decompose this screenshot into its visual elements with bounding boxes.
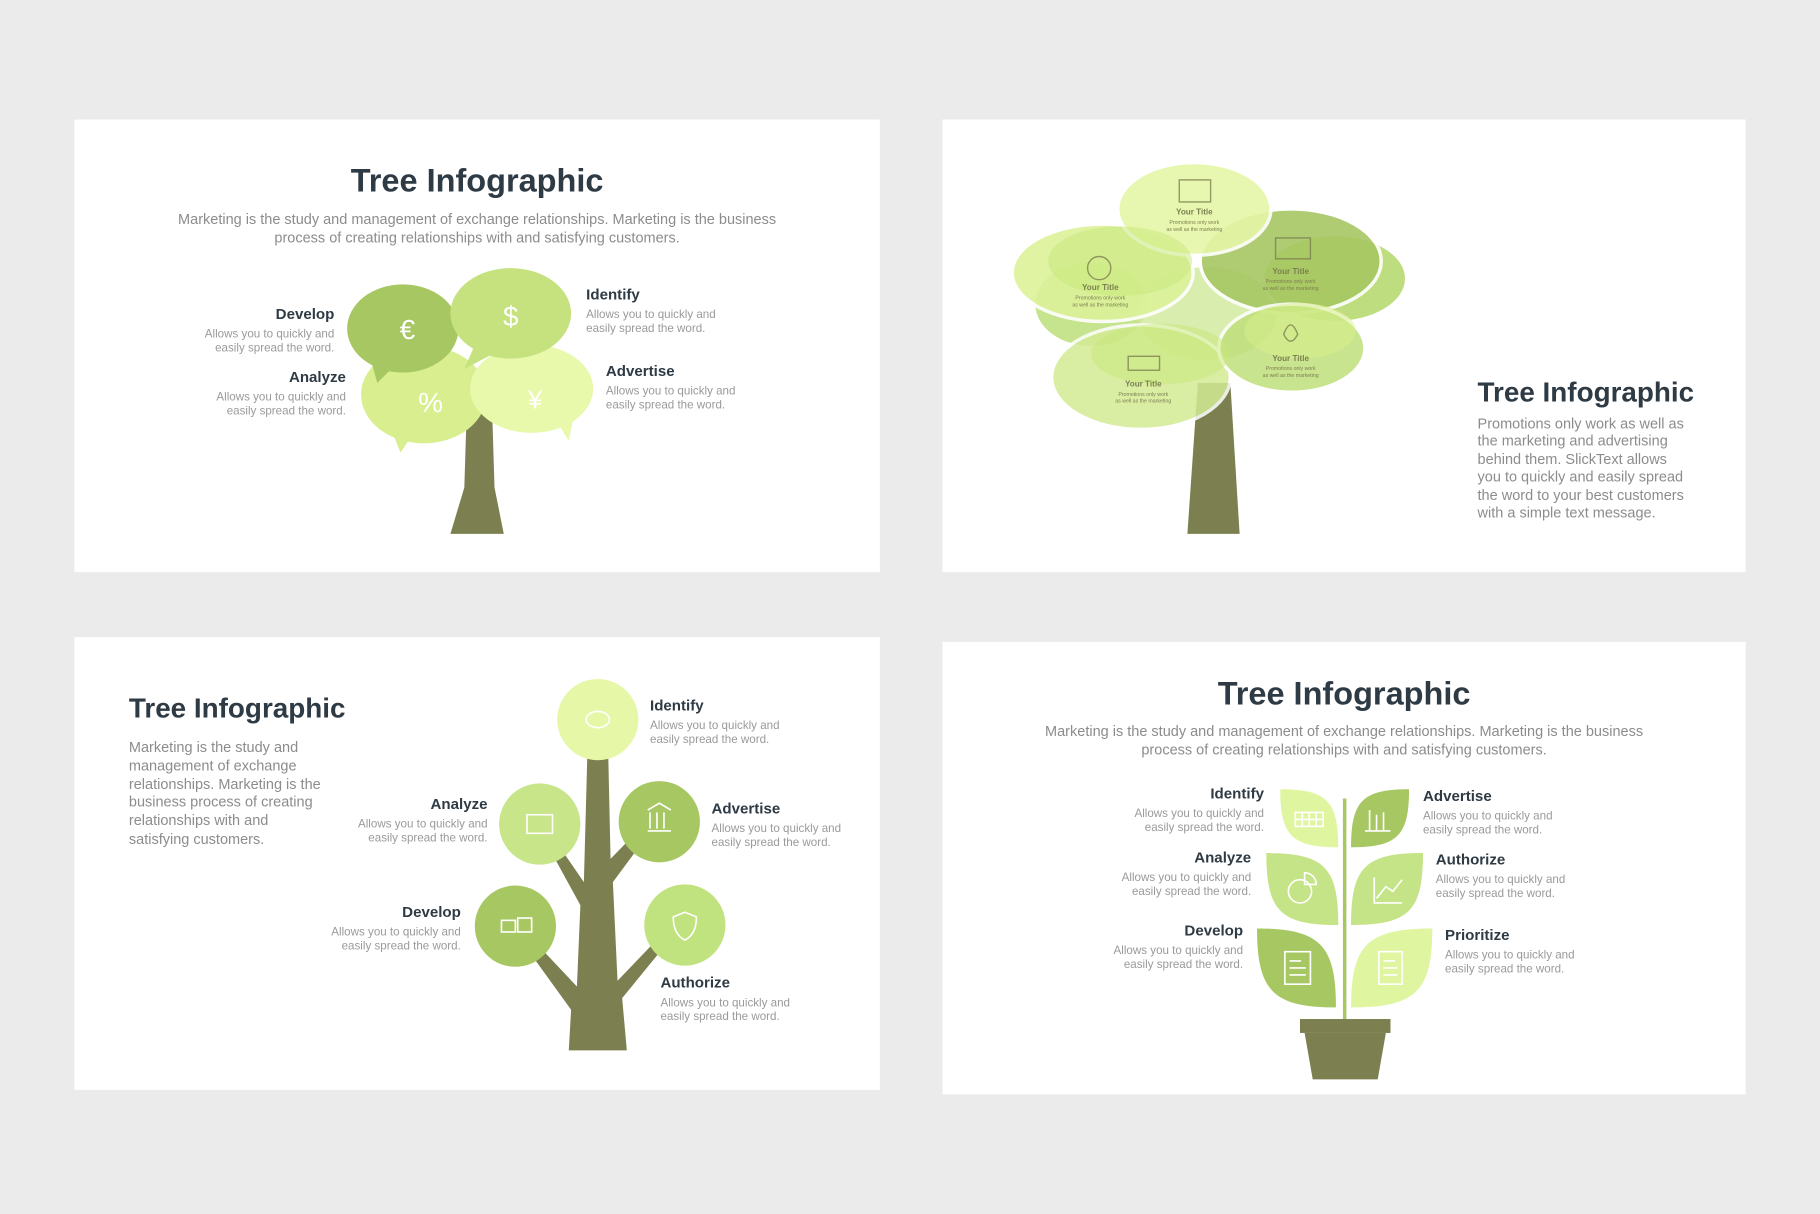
label: develop [1114, 922, 1243, 971]
label: advertise [1423, 788, 1553, 836]
label: advertise: Advertise [1423, 788, 1492, 805]
label: advertise: easily spread the word. [606, 399, 725, 412]
label: advertise [606, 363, 735, 412]
label: advertise: easily spread the word. [712, 836, 831, 849]
label: develop: Develop [276, 306, 334, 323]
canopy icons and labels: Promotions only work [1118, 392, 1169, 398]
label: authorize: easily spread the word. [660, 1010, 780, 1023]
label: develop: Develop [1184, 922, 1243, 939]
title: Tree Infographic [1478, 377, 1694, 408]
label: advertise: Advertise [606, 363, 675, 380]
panel: speech bubble tree [74, 120, 880, 572]
label: identify: easily spread the word. [650, 733, 769, 746]
label: analyze: Analyze [289, 369, 346, 386]
label: analyze: easily spread the word. [227, 404, 346, 417]
circle: identify [557, 679, 638, 760]
label: authorize: Authorize [660, 975, 730, 992]
paragraph: relationships. Marketing is the [129, 777, 321, 793]
paragraph [129, 740, 321, 848]
label: advertise: Allows you to quickly and [1423, 809, 1553, 822]
label: authorize: easily spread the word. [1436, 887, 1555, 900]
label: analyze: Analyze [431, 796, 488, 813]
label: advertise: Allows you to quickly and [712, 822, 841, 835]
label: analyze: Allows you to quickly and [358, 818, 488, 831]
circle: advertise [619, 781, 700, 862]
bubble: analyze [361, 346, 486, 453]
panel: potted plant [942, 642, 1746, 1094]
bubble: develop: € [400, 314, 416, 345]
label: identify [1134, 786, 1265, 834]
subtitle: Marketing is the study and management of exchange relationships. Marketing is the business [1045, 724, 1643, 740]
label: analyze: Allows you to quickly and [1122, 871, 1251, 884]
paragraph: the word to your best customers [1478, 488, 1684, 504]
label: authorize: Allows you to quickly and [660, 996, 790, 1009]
label: prioritize: easily spread the word. [1445, 963, 1564, 976]
subtitle: Marketing is the study and management of exchange relationships. Marketing is the business [178, 212, 776, 228]
subtitle: process of creating relationships with and satisfying customers. [1141, 742, 1547, 758]
label: identify: easily spread the word. [1145, 821, 1264, 834]
panel: overlapping canopy tree [942, 120, 1746, 572]
stem [1343, 799, 1346, 1021]
leaves [1257, 789, 1432, 1007]
canopy ellipses [1012, 162, 1407, 429]
label: advertise: Allows you to quickly and [606, 385, 735, 398]
paragraph: Promotions only work as well as [1478, 416, 1684, 432]
label: prioritize [1445, 927, 1575, 976]
label: develop: easily spread the word. [342, 939, 461, 952]
paragraph: satisfying customers. [129, 832, 264, 848]
label: develop: easily spread the word. [215, 342, 334, 355]
label: develop [331, 904, 461, 952]
bubble: advertise: ¥ [527, 387, 543, 415]
label: develop: Allows you to quickly and [205, 328, 334, 341]
subtitle [178, 212, 776, 247]
label: identify: Allows you to quickly and [586, 308, 716, 321]
panel: branch circle tree [74, 637, 880, 1090]
label: advertise: easily spread the word. [1423, 823, 1542, 836]
bubble: advertise [470, 345, 593, 441]
trunk [1187, 383, 1240, 534]
icons [501, 711, 696, 940]
label: develop: Develop [402, 904, 461, 921]
subtitle: process of creating relationships with and satisfying customers. [274, 231, 680, 247]
canopy icons and labels: Promotions only work [1169, 220, 1220, 226]
label: prioritize: Prioritize [1445, 927, 1510, 944]
label: analyze: easily spread the word. [1132, 885, 1251, 898]
canopy icons and labels: Your Title [1272, 354, 1309, 363]
canopy icons and labels: Your Title [1176, 208, 1213, 217]
canopy icons and labels: as well as the marketing [1072, 302, 1128, 308]
label: identify: easily spread the word. [586, 322, 705, 335]
canopy icons and labels: Promotions only work [1075, 295, 1126, 301]
label: authorize: Allows you to quickly and [1436, 873, 1565, 886]
label: identify: Allows you to quickly and [1134, 807, 1264, 820]
leaf icons [1285, 810, 1402, 984]
label: analyze [1122, 849, 1251, 898]
label: authorize [660, 975, 790, 1023]
title: Tree Infographic [351, 163, 603, 199]
label: develop: easily spread the word. [1124, 958, 1243, 971]
label: develop: Allows you to quickly and [1114, 944, 1243, 957]
paragraph: Marketing is the study and [129, 740, 298, 756]
paragraph [1477, 416, 1684, 522]
bubble: develop [347, 284, 459, 383]
label: advertise [712, 801, 841, 849]
canopy icons and labels: as well as the marketing [1263, 286, 1319, 292]
label: develop [205, 306, 334, 355]
canopy icons and labels [1072, 180, 1319, 405]
circle: analyze [499, 783, 580, 865]
label: prioritize: Allows you to quickly and [1445, 949, 1575, 962]
label: identify: Identify [650, 697, 704, 714]
label: advertise: Advertise [712, 801, 780, 818]
bubble: analyze: % [418, 387, 443, 418]
label: analyze [358, 796, 488, 844]
title: Tree Infographic [1218, 675, 1470, 711]
circle: develop [475, 886, 556, 967]
canopy icons and labels: as well as the marketing [1115, 399, 1171, 405]
canopy icons and labels: Promotions only work [1266, 279, 1316, 285]
label: identify [650, 697, 780, 746]
canopy icons and labels: Your Title [1272, 267, 1309, 276]
label: identify [586, 286, 716, 335]
paragraph: with a simple text message. [1477, 506, 1656, 522]
paragraph: business process of creating [129, 795, 313, 811]
canopy icons and labels: Your Title [1082, 283, 1119, 292]
trunk [450, 412, 504, 534]
canopy icons and labels: Your Title [1125, 379, 1162, 388]
label: identify: Identify [586, 286, 640, 303]
label: develop: Allows you to quickly and [331, 925, 461, 938]
canopy icons and labels: as well as the marketing [1166, 227, 1222, 233]
title: Tree Infographic [129, 692, 346, 723]
label: analyze: Analyze [1194, 849, 1251, 866]
label: analyze: easily spread the word. [368, 831, 488, 844]
canopy icons and labels: as well as the marketing [1263, 373, 1319, 379]
paragraph: you to quickly and easily spread [1478, 470, 1683, 486]
bubble: identify: $ [503, 301, 519, 332]
pot [1300, 1019, 1390, 1079]
paragraph: management of exchange [129, 759, 297, 775]
bubble: identify [450, 268, 571, 369]
canopy icons and labels: Promotions only work [1266, 366, 1316, 372]
circle: authorize [644, 884, 725, 966]
label: authorize: Authorize [1436, 852, 1505, 869]
label: identify: Allows you to quickly and [650, 719, 780, 732]
paragraph: relationships with and [129, 813, 268, 829]
subtitle [1045, 724, 1643, 758]
trunk with branches [517, 754, 679, 1050]
paragraph: the marketing and advertising [1478, 434, 1668, 450]
label: authorize [1436, 852, 1565, 900]
label: analyze: Allows you to quickly and [216, 390, 346, 403]
paragraph: behind them. SlickText allows [1478, 452, 1667, 468]
label: identify: Identify [1210, 786, 1265, 803]
label: analyze [216, 369, 346, 417]
